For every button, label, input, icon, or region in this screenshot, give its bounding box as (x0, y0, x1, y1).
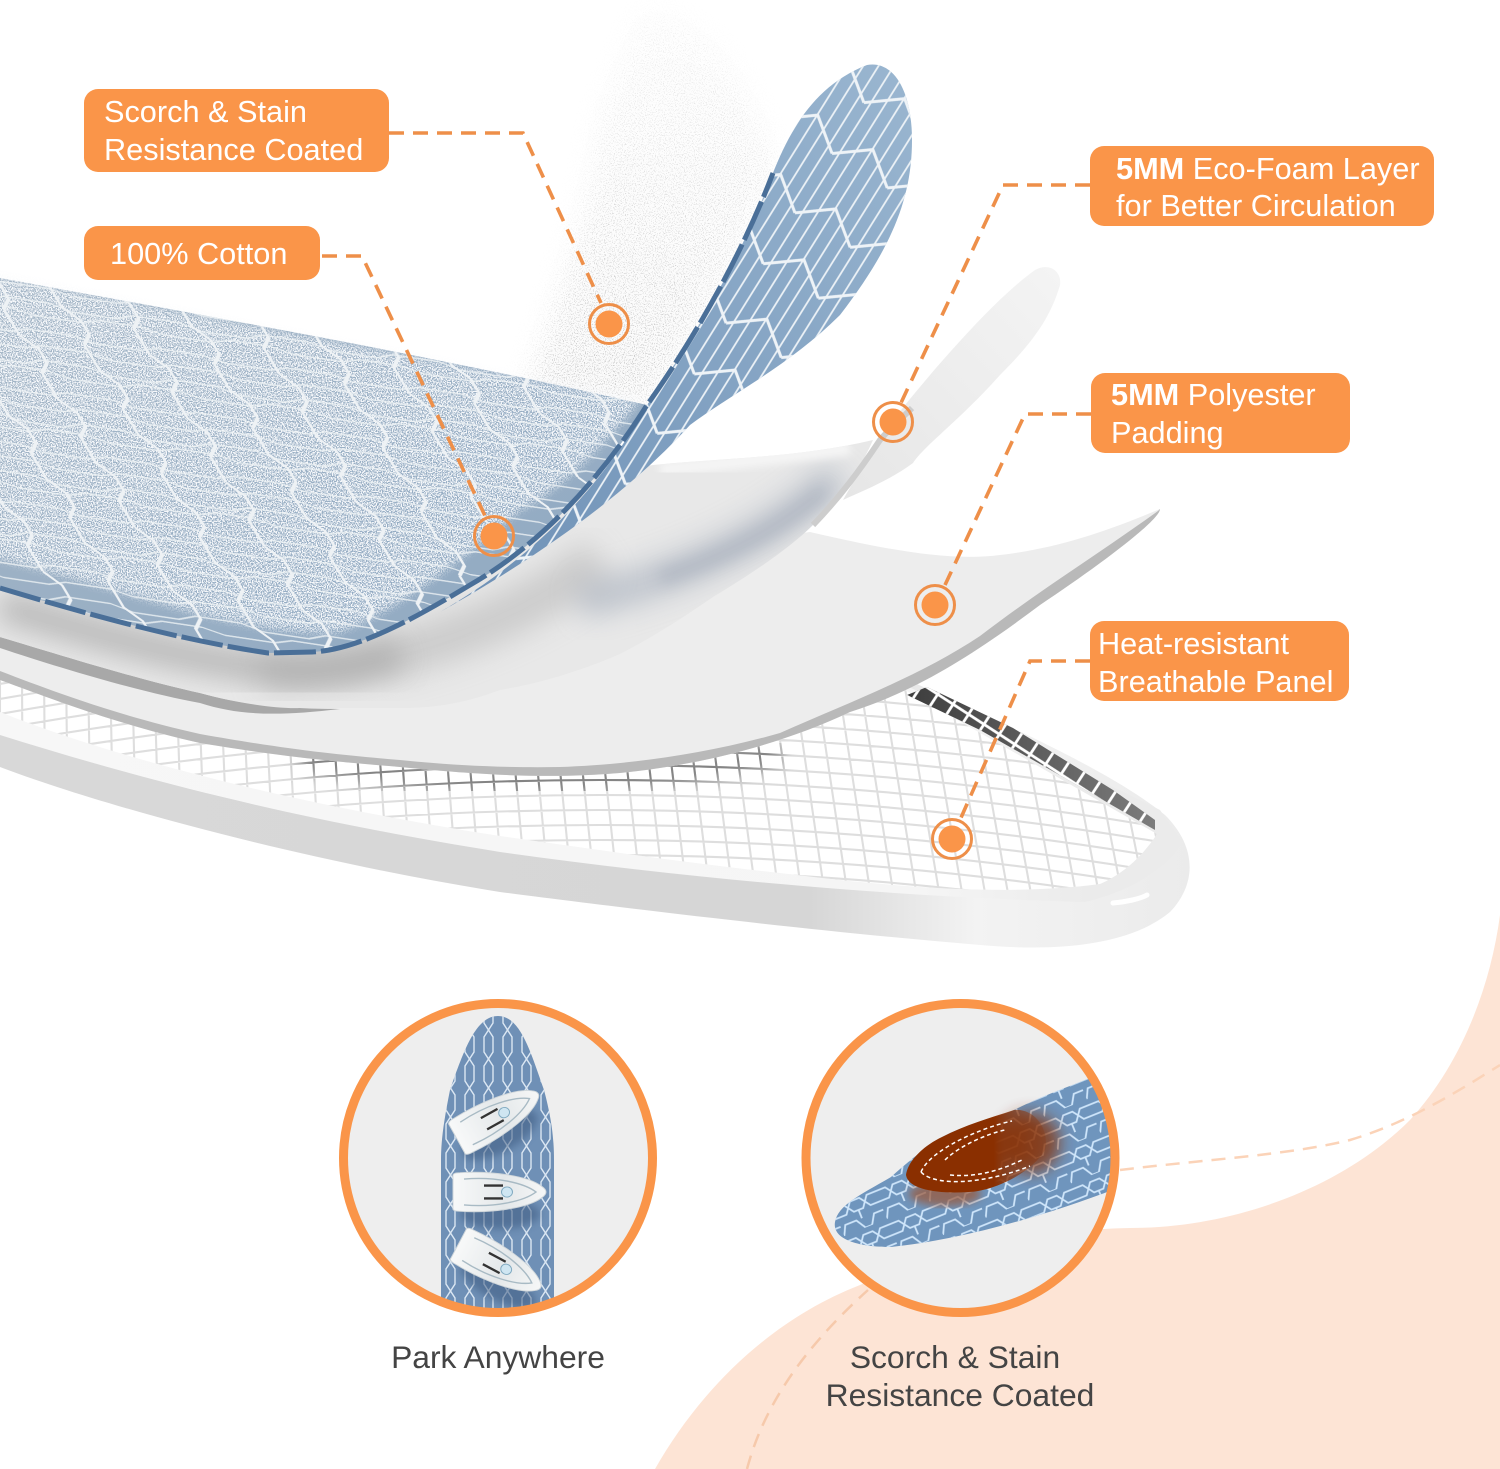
panel outer rim (0, 680, 1190, 947)
leader line (900, 185, 1090, 405)
circle background (343, 1003, 653, 1313)
marker (590, 304, 628, 344)
callout: breathable panel (932, 621, 1349, 858)
shadow under cotton layer (0, 605, 400, 672)
layer: cotton fabric surface (0, 64, 912, 660)
callout box (1090, 146, 1434, 226)
marker (474, 516, 514, 556)
callout: 100% cotton (84, 226, 514, 556)
board illustration (834, 1078, 1110, 1247)
foam shading (0, 448, 850, 672)
lit band (660, 448, 850, 470)
callout text: Heat-resistant (1098, 626, 1289, 661)
fabric top face (0, 278, 647, 653)
dust haze (480, 0, 840, 420)
leader line (389, 133, 601, 303)
padding body (0, 509, 1160, 776)
panel: park anywhere circle (343, 1003, 653, 1320)
label: resistance coated: Resistance Coated (826, 1377, 1094, 1413)
padding speckled edge (0, 509, 1160, 776)
marker (932, 820, 972, 858)
board body (834, 1078, 1110, 1247)
iron bottom (450, 1228, 542, 1292)
rim highlight (1113, 895, 1147, 903)
callout text line 2: Padding (1111, 415, 1224, 450)
foam tip (843, 267, 1060, 500)
board pattern (445, 1016, 551, 1308)
callout box (1091, 373, 1350, 453)
callout: eco-foam layer (874, 146, 1434, 442)
leader line (945, 414, 1091, 585)
layer: heat-resistant breathable panel (0, 680, 1190, 948)
callout box (84, 226, 320, 280)
darker fold core (660, 490, 825, 578)
scorch fading right side (1000, 1113, 1060, 1173)
dust speckle (521, 21, 777, 404)
iron middle (453, 1172, 546, 1212)
fabric dark seam (0, 173, 773, 653)
scorch shadow (909, 1182, 981, 1206)
dust cloud: scorch coating (520, 20, 778, 404)
top face trellis pattern (0, 278, 647, 653)
decorative dashed trail right (1120, 1065, 1500, 1170)
callout box (84, 89, 389, 172)
callout text line 2: Breathable Panel (1098, 664, 1333, 699)
circle ring (344, 1004, 652, 1312)
peach background shape (655, 915, 1500, 1469)
circle ring (806, 1004, 1115, 1312)
label: scorch and stain: Scorch & Stain (850, 1339, 1060, 1375)
layer: 5mm polyester padding (0, 509, 1160, 776)
callout text: 5MM Polyester (1111, 377, 1316, 412)
blue-gray fold shadow (580, 474, 838, 602)
panel mesh grid (0, 680, 1156, 890)
foam gray speckled edge left (0, 637, 340, 714)
callout text: 5MM Eco-Foam Layer (1116, 151, 1420, 186)
scorch mark (906, 1110, 1046, 1192)
foam fold strip (813, 408, 912, 525)
panel dark edge band (907, 687, 1155, 830)
mesh shadowed grid (289, 743, 792, 791)
callout: scorch and stain resistance (84, 89, 628, 344)
callout box (1090, 621, 1349, 701)
marker (874, 402, 912, 442)
leader line (960, 661, 1090, 820)
back face pattern (440, 64, 912, 612)
callout text line 2: Resistance Coated (104, 132, 363, 167)
circle background (806, 1003, 1116, 1313)
callout: polyester padding (916, 373, 1350, 624)
board body (441, 1016, 554, 1320)
layer: 5mm eco-foam (0, 267, 1060, 714)
scorch stitching (921, 1121, 1030, 1182)
board pattern (835, 1079, 1110, 1247)
panel inner rim (0, 685, 1182, 902)
top face speckle (0, 278, 642, 638)
callout text line 2: for Better Circulation (1116, 188, 1396, 223)
callout text: Scorch & Stain (104, 94, 307, 129)
marker (916, 586, 954, 624)
panel mesh field (0, 680, 1157, 890)
fabric back face (curled tip) (440, 64, 912, 612)
panel: scorch and stain circle (806, 1003, 1125, 1313)
decorative dashed trail bottom (747, 1290, 868, 1469)
iron shadows (458, 1110, 543, 1308)
mesh grid lines (0, 680, 1156, 890)
iron top (448, 1090, 540, 1155)
label: park anywhere: Park Anywhere (391, 1339, 605, 1375)
leader line (322, 256, 487, 520)
callout text: 100% Cotton (110, 236, 287, 271)
foam body (0, 440, 873, 708)
board illustration (441, 1016, 554, 1320)
long soft shadow along cotton edge (260, 560, 600, 668)
